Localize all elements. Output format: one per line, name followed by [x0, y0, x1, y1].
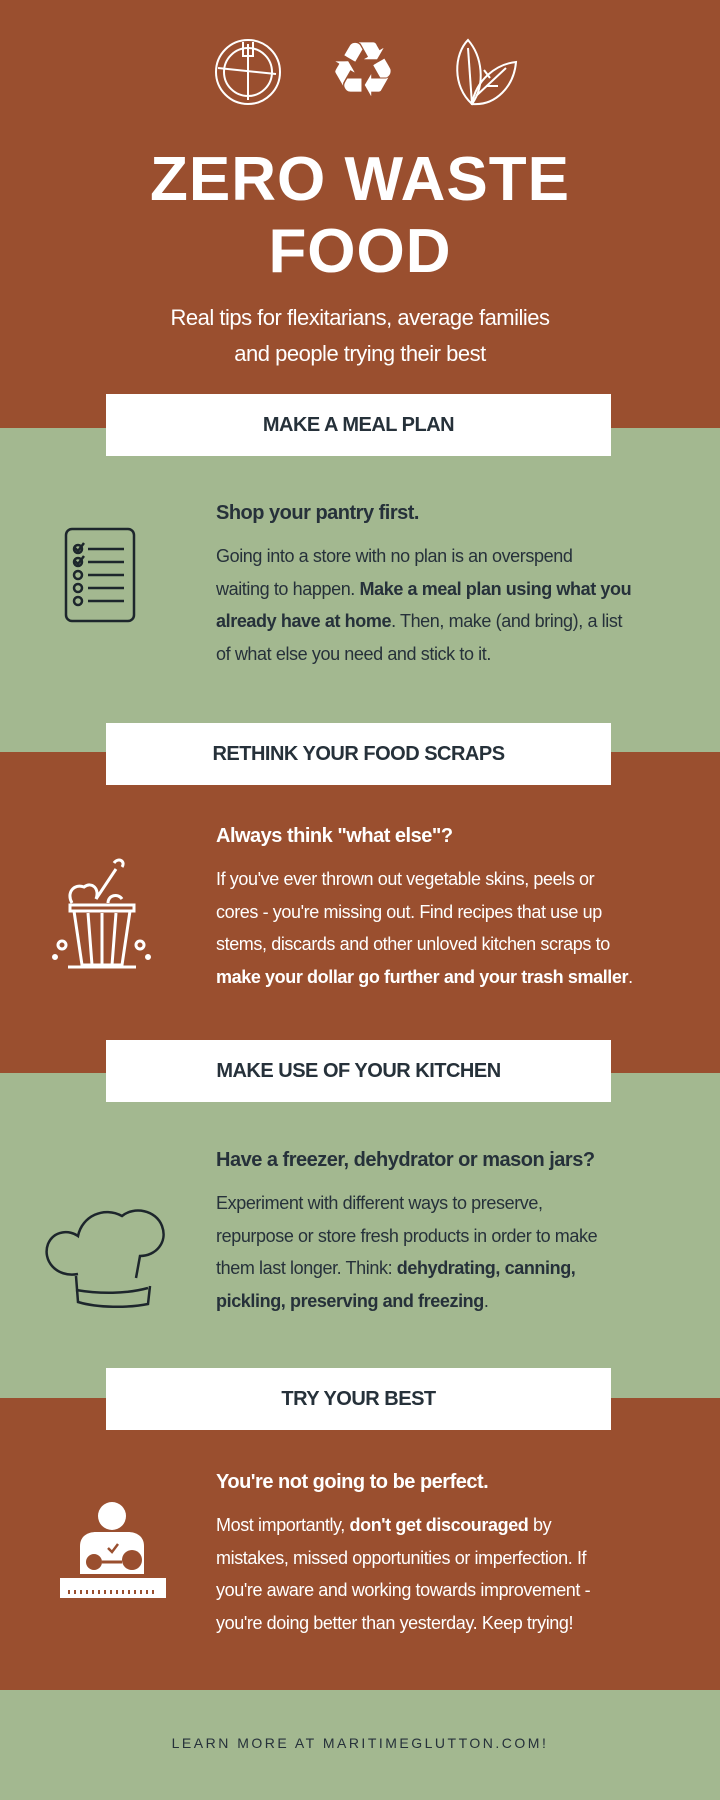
band 2 brown	[0, 752, 720, 1073]
text: meal plan: of what else you need and stick to it.	[216, 644, 491, 664]
icon: person cooking	[60, 1502, 166, 1598]
text: kitchen	[216, 1149, 597, 1311]
icon: recycle: ♻	[329, 25, 397, 114]
text: scraps: Always think "what else"?	[216, 825, 453, 847]
text: kitchen: pickling, preserving and freezing.	[216, 1290, 488, 1310]
icon: checklist	[64, 528, 136, 622]
text: meal plan: Shop your pantry first.	[216, 502, 419, 524]
text: try your best: mistakes, missed opportunities or imperfection. If	[216, 1548, 586, 1568]
text: kitchen: Have a freezer, dehydrator or mason jars?	[216, 1149, 595, 1171]
section 3 heading: MAKE USE OF YOUR KITCHEN	[216, 1060, 501, 1082]
icon: chef hat	[45, 1209, 165, 1308]
band 4 brown	[0, 1398, 720, 1690]
section 2 heading	[106, 723, 611, 785]
title: ZERO WASTE	[150, 145, 570, 214]
icon: plate with cutlery	[216, 40, 280, 104]
title	[150, 145, 570, 286]
text: meal plan: waiting to happen. Make a meal plan using what you	[216, 578, 631, 598]
text: try your best: Most importantly, don't get discouraged by	[216, 1515, 551, 1535]
text: scraps	[216, 825, 633, 987]
text: kitchen: them last longer. Think: dehydrating, canning,	[216, 1258, 575, 1278]
subtitle	[170, 305, 550, 366]
section 4 heading: TRY YOUR BEST	[281, 1388, 436, 1410]
text: kitchen: Experiment with different ways to preserve,	[216, 1193, 543, 1213]
text: try your best: you're aware and working towards improvement -	[216, 1580, 590, 1600]
section 1 heading: MAKE A MEAL PLAN	[263, 414, 454, 436]
icon: leaves	[457, 40, 516, 104]
text: scraps: cores - you're missing out. Find recipes that use up	[216, 902, 602, 922]
section 2 heading: RETHINK YOUR FOOD SCRAPS	[212, 742, 505, 764]
band 3 green	[0, 1073, 720, 1398]
text: scraps: If you've ever thrown out vegetable skins, peels or	[216, 869, 594, 889]
section 3 heading	[106, 1040, 611, 1102]
subtitle: Real tips for flexitarians, average families	[170, 305, 550, 330]
header icons	[215, 38, 518, 106]
text: meal plan	[216, 502, 631, 664]
subtitle: and people trying their best	[234, 341, 486, 366]
section 4 heading	[106, 1368, 611, 1430]
text: meal plan: already have at home. Then, make (and bring), a list	[216, 611, 622, 631]
band 1 green	[0, 428, 720, 752]
section 1 heading	[106, 394, 611, 456]
text: kitchen: repurpose or store fresh products in order to make	[216, 1226, 597, 1246]
icon: scraps bin	[52, 858, 151, 968]
text: try your best: you're doing better than yesterday. Keep trying!	[216, 1612, 573, 1632]
header band	[0, 0, 720, 428]
text: meal plan: Going into a store with no plan is an overspend	[216, 546, 572, 566]
text: try your best	[216, 1471, 590, 1633]
footer: LEARN MORE AT MARITIMEGLUTTON.COM!	[172, 1735, 548, 1751]
text: try your best: You're not going to be perfect.	[216, 1471, 488, 1493]
text: scraps: stems, discards and other unloved kitchen scraps to	[216, 934, 610, 954]
footer band	[0, 1690, 720, 1800]
title: FOOD	[268, 217, 452, 286]
text: scraps: make your dollar go further and your trash smaller.	[216, 966, 633, 986]
